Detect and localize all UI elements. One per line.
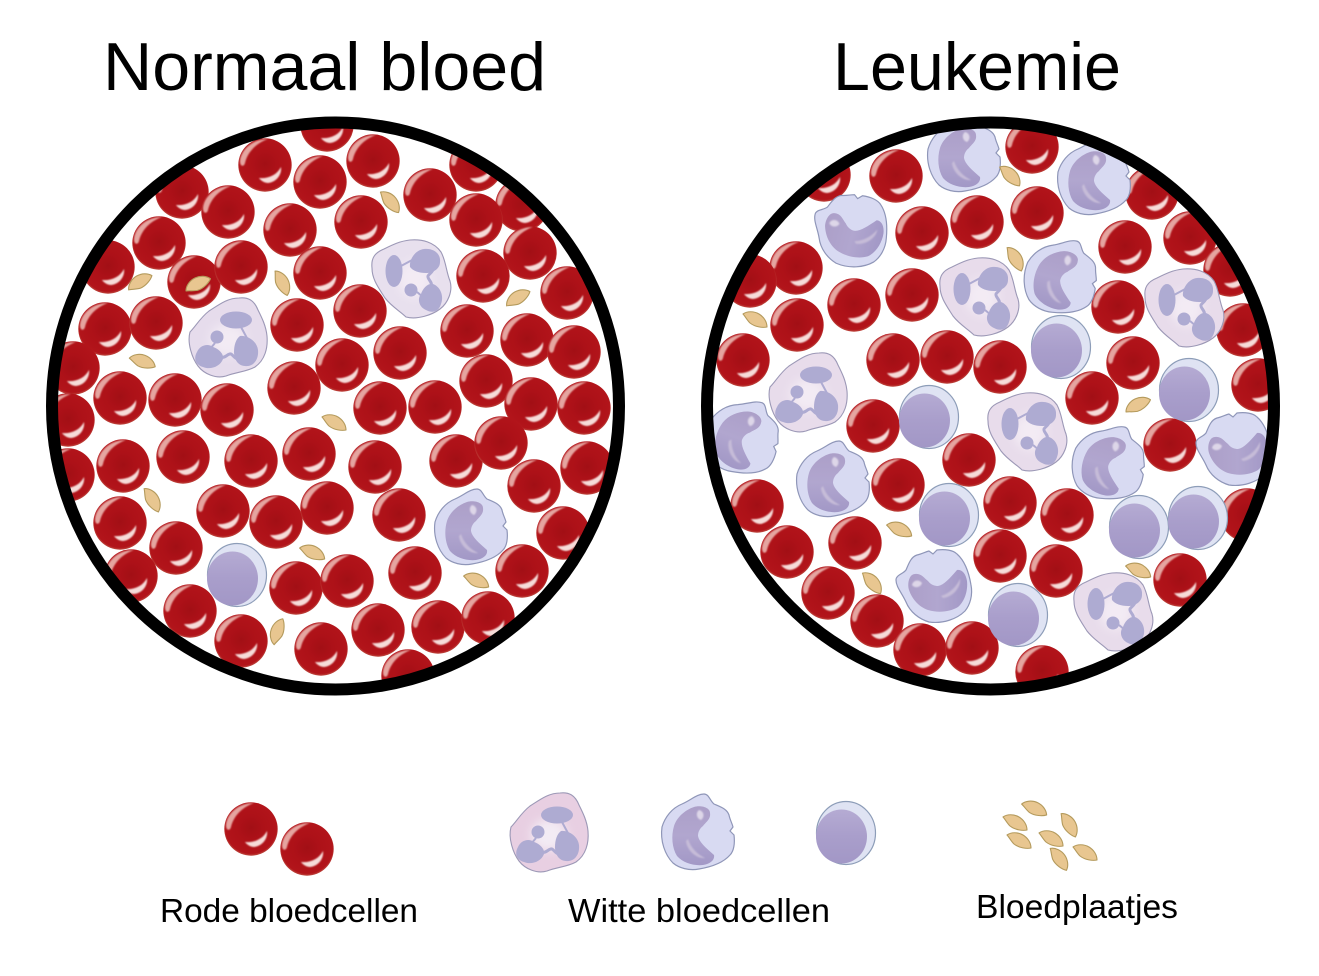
icon: platelets cluster	[1003, 800, 1097, 871]
red blood cells, leukemia	[716, 120, 1285, 699]
legend label: Bloedplaatjes: Bloedplaatjes	[976, 888, 1178, 925]
white blood cells, leukemia	[696, 116, 1272, 651]
legend label: Witte bloedcellen: Witte bloedcellen	[568, 892, 830, 929]
ring: normal blood	[52, 122, 619, 690]
legend: white blood cells	[510, 793, 876, 929]
title: Leukemie: Leukemie	[833, 29, 1121, 105]
icon: three white blood cell types	[510, 793, 876, 872]
legend: platelets	[976, 800, 1178, 925]
red blood cells, normal	[58, 128, 611, 680]
panel: normal blood circle	[41, 98, 619, 703]
platelets, leukemia	[743, 165, 1151, 594]
legend label: Rode bloedcellen: Rode bloedcellen	[160, 892, 418, 929]
platelets, normal	[127, 190, 530, 645]
icon: two red blood cells	[224, 802, 334, 876]
white blood cells, normal	[189, 240, 507, 606]
ring: leukemia	[707, 122, 1274, 690]
title: Normaal bloed: Normaal bloed	[103, 29, 546, 105]
legend: red blood cells	[160, 802, 418, 929]
panel: leukemia circle	[696, 116, 1285, 699]
